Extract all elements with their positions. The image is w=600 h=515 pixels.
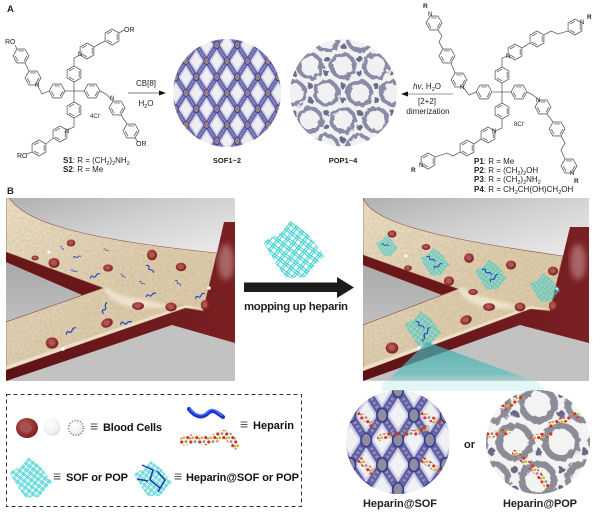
compound labels P1 to P4: 2 bbox=[515, 190, 518, 196]
label B: B bbox=[7, 186, 14, 197]
compound labels P1 to P4: : R = (CH bbox=[484, 175, 517, 184]
magnification beam inside scene bbox=[388, 342, 534, 381]
compound labels S1 S2: 2 bbox=[127, 161, 130, 167]
molecule: S1 S2 tetrahedral monomer: OR bbox=[124, 27, 134, 34]
circle: heparin at SOF bbox=[345, 389, 451, 495]
molecule: P1 to P4 stilbazolium monomer: N bbox=[428, 12, 432, 18]
compound labels S1 S2: S1: R = (CH bbox=[63, 156, 106, 165]
POP label: POP1~4 bbox=[329, 156, 358, 165]
molecule: P1 to P4 stilbazolium monomer: N bbox=[570, 171, 574, 177]
heparin at POP label: Heparin@POP bbox=[503, 498, 577, 510]
SOF or POP label: ≡ bbox=[53, 468, 61, 484]
arrow: CB[8] reaction: H bbox=[138, 99, 144, 108]
compound labels P1 to P4: : R = (CH bbox=[484, 166, 517, 175]
icon: white cell bbox=[44, 418, 60, 436]
compound labels P1 to P4: 2 bbox=[523, 180, 526, 186]
icon: red blood cell bbox=[16, 418, 38, 438]
molecule: P1 to P4 stilbazolium monomer: N bbox=[492, 129, 496, 135]
panel: vessel after treatment bbox=[363, 198, 589, 385]
compound labels S1 S2: : R = Me bbox=[73, 165, 103, 174]
compound labels P1 to P4: 2 bbox=[523, 171, 526, 177]
icon: heparin loaded network bbox=[134, 461, 172, 496]
molecule: P1 to P4 stilbazolium monomer: N bbox=[419, 163, 423, 169]
molecule: P1 to P4 stilbazolium monomer: R bbox=[587, 14, 592, 21]
magnification beam below scene bbox=[381, 381, 545, 391]
legend box bbox=[6, 394, 302, 506]
molecule: S1 S2 tetrahedral monomer: N bbox=[110, 96, 114, 102]
icon: SOF or POP bbox=[9, 458, 53, 498]
molecule: P1 to P4 stilbazolium monomer: R bbox=[423, 3, 428, 10]
arrow: photodimerization: O bbox=[435, 82, 441, 91]
molecule: P1 to P4 stilbazolium monomer: R bbox=[574, 178, 579, 185]
blood cells bbox=[386, 230, 559, 354]
arrow: photodimerization: dimerization bbox=[406, 107, 450, 116]
molecule: P1 to P4 stilbazolium monomer: N bbox=[580, 20, 584, 26]
molecule: P1 to P4 stilbazolium monomer: R bbox=[411, 167, 416, 174]
compound labels P1 to P4: P3 bbox=[474, 175, 484, 184]
molecule: S1 S2 tetrahedral monomer: N bbox=[65, 129, 69, 135]
heparin chains in POP bbox=[488, 398, 577, 487]
heparin at SOF label: Heparin@SOF bbox=[363, 498, 437, 510]
arrow: CB[8] reaction: O bbox=[147, 99, 154, 108]
icon: heparin tube bbox=[189, 408, 223, 417]
arrow: CB[8] reaction: CB[8] bbox=[136, 79, 156, 88]
counter ion 4Cl: − bbox=[99, 112, 102, 117]
molecule: S1 S2 tetrahedral monomer: N bbox=[78, 52, 82, 58]
compound labels P1 to P4: ) bbox=[520, 166, 523, 175]
arrow: photodimerization bbox=[401, 82, 453, 116]
arrow: photodimerization: 2 bbox=[432, 87, 435, 93]
blood cells bbox=[31, 240, 211, 351]
panel: vessel before treatment bbox=[6, 198, 235, 381]
icon: heparin atoms bbox=[184, 435, 235, 445]
heparin at SOF or POP label: ≡ bbox=[174, 468, 182, 484]
molecule: P1 to P4 stilbazolium monomer bbox=[411, 3, 592, 185]
molecule: P1 to P4 stilbazolium monomer: N bbox=[460, 85, 464, 91]
blood cells label: Blood Cells bbox=[103, 422, 162, 434]
circle: SOF lattice bbox=[173, 39, 281, 147]
compound labels P1 to P4: 2 bbox=[538, 180, 541, 186]
blood cells label: ≡ bbox=[90, 418, 98, 434]
compound labels P1 to P4: P4 bbox=[474, 185, 484, 194]
compound labels P1 to P4: ) bbox=[520, 175, 523, 184]
molecule: S1 S2 tetrahedral monomer: OR bbox=[136, 141, 146, 148]
SOF label: SOF1~2 bbox=[213, 156, 241, 165]
arrow: photodimerization: [2+2] bbox=[418, 97, 436, 106]
compound labels P1 to P4: NH bbox=[526, 175, 538, 184]
molecule: S1 S2 tetrahedral monomer bbox=[5, 27, 146, 160]
compound labels S1 S2: 2 bbox=[112, 161, 115, 167]
compound labels S1 S2: 2 bbox=[106, 161, 109, 167]
compound labels P1 to P4: 2 bbox=[517, 180, 520, 186]
compound labels P1 to P4: : R = CH bbox=[484, 185, 515, 194]
heparin-loaded networks bbox=[376, 236, 560, 346]
SOF or POP label: SOF or POP bbox=[66, 472, 128, 484]
compound labels P1 to P4: P1: R = Me bbox=[474, 157, 514, 166]
arrow: CB[8] reaction: 2 bbox=[144, 104, 147, 110]
heparin label: Heparin bbox=[253, 420, 294, 432]
heparin label: ≡ bbox=[240, 416, 248, 432]
icon: platelet bbox=[68, 420, 84, 436]
circle: POP network bbox=[290, 40, 397, 146]
connector word or: or bbox=[464, 439, 476, 451]
heparin at SOF or POP label: Heparin@SOF or POP bbox=[186, 472, 299, 484]
arrow caption: mopping up heparin bbox=[244, 301, 348, 313]
arrow: CB[8] reaction bbox=[128, 79, 166, 110]
compound labels P1 to P4: P2 bbox=[474, 166, 484, 175]
arrow: photodimerization: hv, H bbox=[413, 82, 432, 91]
compound labels P1 to P4: OH bbox=[561, 185, 573, 194]
counter ion 4Cl: 4Cl bbox=[90, 114, 99, 120]
compound labels P1 to P4: 2 bbox=[558, 190, 561, 196]
molecule: S1 S2 tetrahedral monomer: RO bbox=[5, 39, 16, 46]
heparin strands bbox=[60, 246, 205, 334]
molecule: P1 to P4 stilbazolium monomer: N bbox=[536, 98, 540, 104]
molecule: S1 S2 tetrahedral monomer: RO bbox=[17, 153, 28, 160]
counter ion 8Cl: − bbox=[523, 120, 526, 125]
heparin chains in SOF bbox=[360, 415, 440, 472]
molecule: P1 to P4 stilbazolium monomer: N bbox=[506, 54, 510, 60]
icon: large SOF or POP network bbox=[263, 221, 325, 278]
counter ion 8Cl: 8Cl bbox=[514, 122, 523, 128]
compound labels S1 S2: S2 bbox=[63, 165, 73, 174]
compound labels P1 to P4: CH(OH)CH bbox=[518, 185, 558, 194]
compound labels P1 to P4: OH bbox=[526, 166, 538, 175]
arrow: mopping up heparin bbox=[244, 277, 354, 298]
compound labels S1 S2: ) bbox=[109, 156, 112, 165]
compound labels P1 to P4: 2 bbox=[517, 171, 520, 177]
label A: A bbox=[7, 4, 14, 15]
compound labels S1 S2: NH bbox=[115, 156, 127, 165]
molecule: S1 S2 tetrahedral monomer: N bbox=[35, 83, 39, 89]
circle: heparin at POP bbox=[486, 390, 590, 494]
